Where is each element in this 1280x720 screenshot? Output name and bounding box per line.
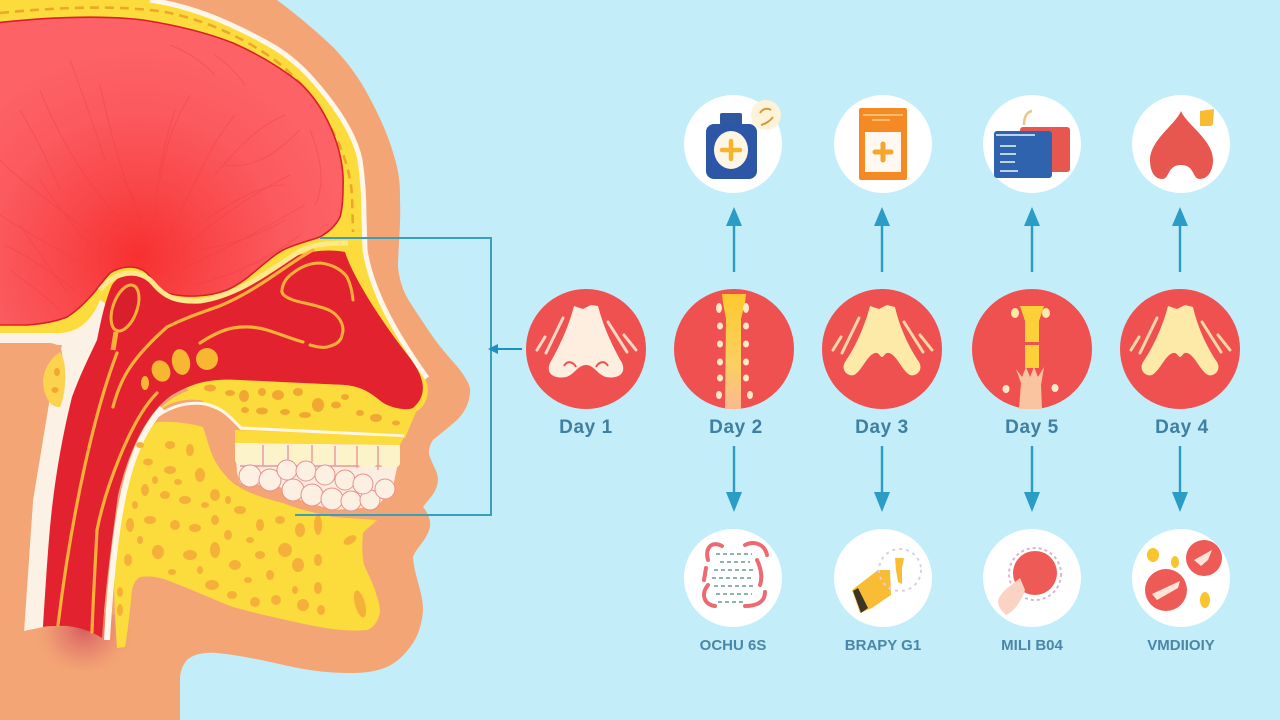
top icon: medicine bottle [684, 95, 782, 193]
top icon: red drop [1132, 95, 1230, 193]
day 2 circle [674, 289, 794, 409]
down arrows [726, 446, 1188, 512]
bottom captions [700, 637, 1215, 654]
brain fibre streaks [0, 45, 321, 310]
skull dashed marrow [0, 8, 353, 232]
neck back white band [0, 300, 118, 631]
adenoid nodules [141, 347, 218, 390]
up arrows [726, 207, 1188, 272]
occipital bone lump [43, 352, 65, 407]
upper teeth [235, 443, 400, 467]
bottom icon: rash pattern [684, 529, 782, 627]
stem below ring [113, 332, 116, 350]
bottom captions: VMDIIOIY [1147, 637, 1215, 654]
lower teeth [239, 460, 395, 511]
day 4 nose icon [1131, 305, 1230, 375]
sphenoid ring [106, 281, 144, 335]
day 3 label: Day 3 [855, 417, 909, 438]
timeline column: Day 1 [526, 289, 646, 438]
pharynx inner orange lines [58, 250, 353, 632]
throat shadow [29, 610, 139, 670]
head skin silhouette [0, 0, 470, 720]
skull white outline [150, 0, 427, 378]
day 5 label: Day 5 [1005, 417, 1059, 438]
bottom captions: MILI B04 [1001, 637, 1063, 654]
timeline column: Day 4 [1120, 289, 1240, 438]
bottom icon: red pills and yellow drops [1132, 529, 1230, 627]
palate bone [157, 381, 414, 438]
day 1 nose icon [537, 305, 636, 377]
bottom captions: BRAPY G1 [845, 637, 921, 654]
day 3 nose icon [833, 305, 932, 375]
day 3 circle [822, 289, 942, 409]
day 2 label: Day 2 [709, 417, 763, 438]
teeth [235, 443, 400, 511]
neck skin block [0, 343, 62, 640]
day 1 circle [526, 289, 646, 409]
day 5 airway icon [1002, 306, 1058, 409]
pharynx and nasal cavity [43, 243, 423, 638]
connector bracket from nose to timeline [295, 238, 522, 515]
top icon: wallet card [983, 95, 1081, 193]
skull bone band [0, 0, 428, 438]
timeline column: Day 5 [972, 289, 1092, 438]
pale band under brain [100, 243, 348, 301]
timeline column: Day 3 [822, 289, 942, 438]
day 1 label: Day 1 [559, 417, 613, 438]
tooth gum lines [240, 445, 400, 470]
day 4 label: Day 4 [1155, 417, 1209, 438]
mouth cavity skin [160, 404, 405, 520]
inner jaw white edge [107, 408, 162, 640]
day 2 spine icon [716, 294, 753, 409]
palate marrow spots [204, 384, 400, 426]
bottom captions: OCHU 6S [700, 637, 766, 654]
bottom icon: yellow nasal spray [834, 529, 932, 627]
top icon: orange medicine box [834, 95, 932, 193]
day 5 circle [972, 289, 1092, 409]
mandible bone [107, 408, 380, 648]
arrow to bracket [494, 348, 522, 350]
upper gum strip [235, 430, 404, 445]
timeline column: Day 2 [674, 289, 794, 438]
day 4 circle [1120, 289, 1240, 409]
jaw marrow spots [117, 441, 368, 619]
bottom icon: hand touching red circle [983, 529, 1081, 627]
palate white underline [150, 403, 404, 436]
head anatomy illustration [0, 0, 470, 720]
brain [0, 17, 343, 325]
